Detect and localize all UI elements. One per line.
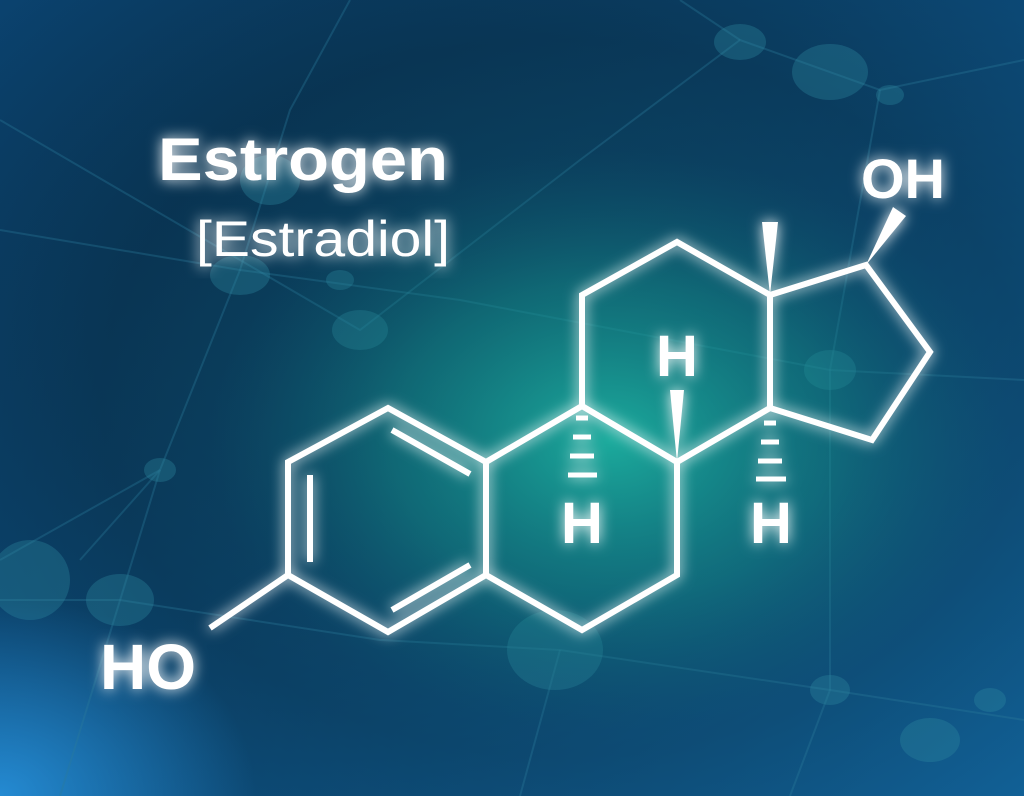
molecule: estradiol structure (100, 147, 945, 703)
molecule: estradiol structure: H (561, 491, 603, 556)
atom labels: H (656, 324, 698, 389)
molecule: estradiol structure: OH (861, 147, 945, 210)
title: Estrogen (158, 126, 448, 193)
subtitle: [Estradiol] (196, 211, 450, 267)
molecule: estradiol structure: H (750, 491, 792, 556)
molecule: estradiol structure: HO (100, 631, 196, 703)
